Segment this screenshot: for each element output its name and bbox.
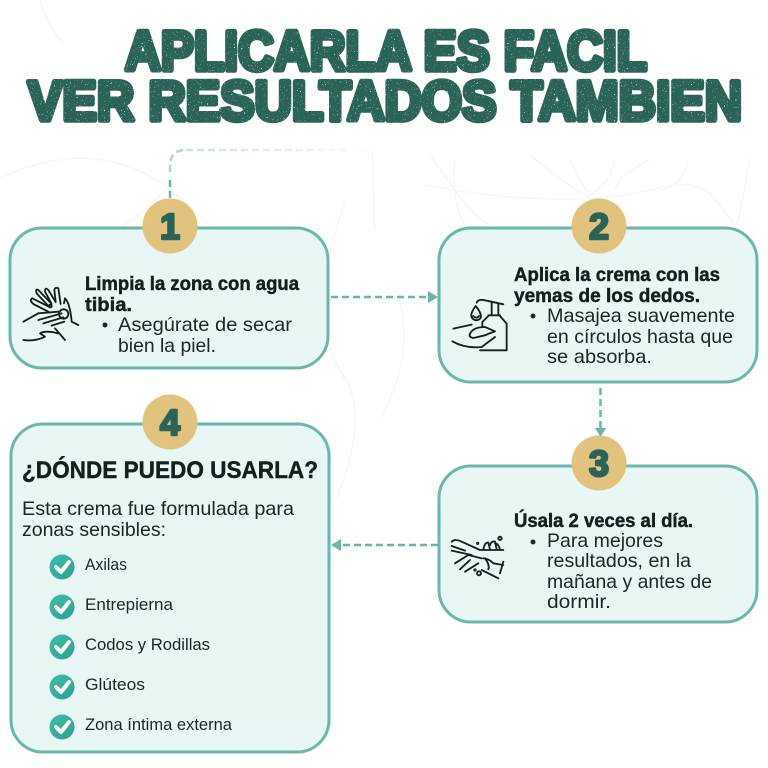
step 1 text: tibia.	[85, 295, 132, 316]
icon: rubbing hands	[452, 537, 503, 578]
badge 1	[142, 198, 198, 254]
step 1 text: Limpia la zona con agua	[85, 274, 299, 295]
arrow: start to step 1	[170, 150, 378, 198]
step 4 intro	[22, 498, 294, 541]
step 3 text: mañana y antes de	[547, 571, 712, 593]
step 1 text: Asegúrate de secar	[118, 314, 293, 336]
badge 2	[572, 198, 626, 254]
item: Axilas	[50, 554, 127, 580]
badge 2: 2	[589, 206, 609, 247]
step 2 text: yemas de los dedos.	[514, 286, 700, 307]
item: Glúteos: Glúteos	[85, 676, 145, 694]
item: Codos y Rodillas	[50, 634, 210, 660]
item: Entrepierna	[50, 594, 174, 620]
panel: step 4	[11, 394, 329, 752]
arrow: step 3 to step 4	[331, 539, 438, 551]
arrow: step 2 to step 3	[595, 388, 606, 437]
step 2 text: se absorba.	[547, 346, 652, 368]
panel: step 2	[439, 198, 757, 382]
step 3 text	[514, 510, 712, 613]
step 3 text: Úsala 2 veces al día.	[514, 510, 693, 532]
step 2 text: Masajea suavemente	[547, 305, 735, 327]
step 1 text	[85, 274, 299, 357]
step 1 text: bien la piel.	[118, 335, 216, 357]
item: Glúteos	[50, 674, 145, 700]
item: Zona íntima externa	[50, 714, 233, 740]
title: APLICARLA ES FACIL	[125, 19, 647, 82]
step 2 text: Aplica la crema con las	[514, 265, 720, 286]
background leaf pattern	[0, 0, 750, 500]
badge 4: 4	[160, 402, 180, 443]
badge 1: 1	[160, 206, 180, 247]
icon: pump bottle and hand	[452, 300, 507, 350]
panel: step 3	[439, 436, 757, 622]
step 4 intro: zonas sensibles:	[22, 519, 166, 541]
step 4 heading: ¿DÓNDE PUEDO USARLA?	[22, 456, 318, 484]
step 3 text: resultados, en la	[547, 550, 691, 572]
arrow: step 1 to step 2	[331, 291, 438, 303]
badge 3: 3	[589, 443, 609, 484]
step 2 text: en círculos hasta que	[547, 326, 733, 348]
badge 3	[572, 436, 626, 490]
step 3 text: Para mejores	[547, 530, 663, 552]
icon: washing hands	[23, 288, 78, 340]
panel: step 1	[10, 198, 328, 368]
item: Entrepierna: Entrepierna	[85, 596, 174, 614]
step 3 text: dormir.	[547, 591, 611, 613]
step 4 intro: Esta crema fue formulada para	[22, 498, 294, 520]
item: Zona íntima externa: Zona íntima externa	[85, 716, 233, 734]
badge 4	[142, 394, 198, 450]
checklist	[50, 554, 233, 740]
step 2 text	[514, 265, 735, 368]
item: Axilas: Axilas	[85, 556, 127, 574]
title	[28, 19, 742, 132]
item: Codos y Rodillas: Codos y Rodillas	[85, 636, 210, 654]
